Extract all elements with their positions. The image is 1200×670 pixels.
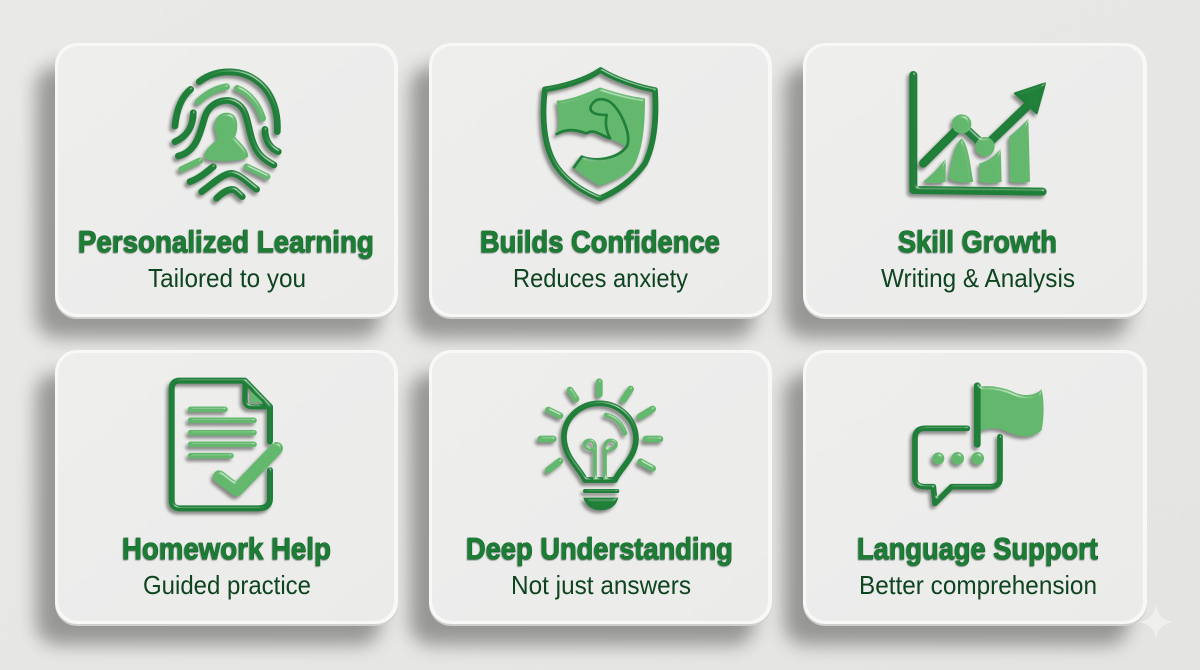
panel: skill growth: [803, 43, 1147, 319]
text: tailored to you: Tailored to you: [148, 263, 306, 293]
panel: personalized learning: [55, 43, 398, 319]
text: not just answers: Not just answers: [511, 570, 691, 600]
heading: language support: Language Support: [857, 531, 1098, 566]
icon: growth chart with arrow: [913, 75, 1045, 192]
heading: deep understanding: Deep Understanding: [466, 531, 733, 566]
panel: language support: [803, 350, 1147, 626]
icon: light bulb with rays: [541, 382, 660, 510]
icon: document with check mark: [172, 381, 277, 508]
panel: builds confidence: [429, 43, 772, 319]
icon: sparkle: [1139, 605, 1173, 639]
text: better comprehension: Better comprehension: [859, 570, 1097, 600]
icon: speech bubble with flag: [915, 386, 1044, 503]
panel: homework help: [55, 350, 398, 626]
icon: shield with flexed arm: [544, 70, 656, 198]
text: writing and analysis: Writing & Analysis: [881, 263, 1075, 293]
icon: fingerprint with person: [175, 72, 278, 198]
heading: builds confidence: Builds Confidence: [480, 224, 720, 259]
text: guided practice: Guided practice: [143, 570, 311, 600]
heading: skill growth: Skill Growth: [898, 224, 1057, 259]
panel: deep understanding: [429, 350, 772, 626]
heading: homework help: Homework Help: [122, 531, 331, 566]
text: reduces anxiety: Reduces anxiety: [513, 263, 688, 293]
heading: personalized learning: Personalized Learning: [78, 224, 374, 259]
